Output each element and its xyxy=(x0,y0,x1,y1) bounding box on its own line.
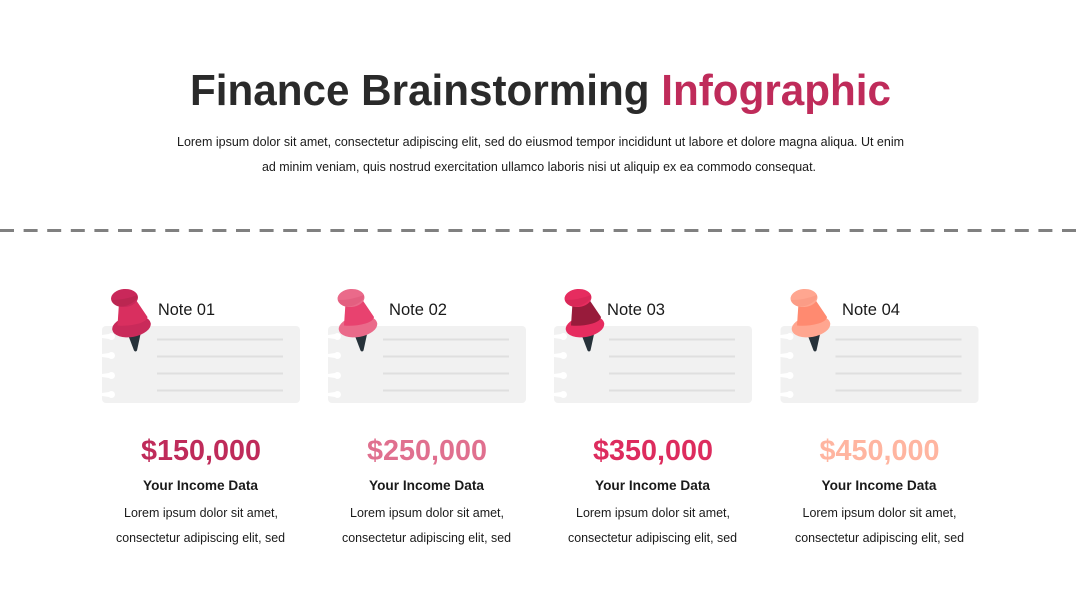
description 02: consectetur adipiscing elit, sed xyxy=(342,531,511,545)
icon: pushpin 01 xyxy=(110,288,153,352)
subheading 02: Your Income Data xyxy=(369,477,484,493)
description 04: Lorem ipsum dolor sit amet, xyxy=(802,506,956,520)
description 01 xyxy=(116,506,285,545)
icon: pushpin 02 xyxy=(337,288,379,352)
description 03: consectetur adipiscing elit, sed xyxy=(568,531,737,545)
label: note 04: Note 04 xyxy=(842,301,900,319)
title: Finance Brainstorming Infographic xyxy=(190,66,891,115)
panel: note 04 xyxy=(780,288,978,545)
intro text xyxy=(177,135,904,174)
description 01: consectetur adipiscing elit, sed xyxy=(116,531,285,545)
panel: note 02 xyxy=(328,288,526,545)
description 03: Lorem ipsum dolor sit amet, xyxy=(576,506,730,520)
note paper 01 xyxy=(102,326,300,403)
amount 01: $150,000 xyxy=(141,435,261,467)
label: note 01: Note 01 xyxy=(158,301,215,319)
intro text: ad minim veniam, quis nostrud exercitation ullamco laboris nisi ut aliquip ex ea commodo consequat. xyxy=(262,160,816,174)
amount 02: $250,000 xyxy=(367,435,487,467)
icon: pushpin 04 xyxy=(790,288,832,352)
amount 03: $350,000 xyxy=(593,435,713,467)
description 02 xyxy=(342,506,511,545)
label: note 03: Note 03 xyxy=(607,301,665,319)
description 01: Lorem ipsum dolor sit amet, xyxy=(124,506,278,520)
note paper 04 xyxy=(780,326,978,403)
subheading 01: Your Income Data xyxy=(143,477,258,493)
label: note 02: Note 02 xyxy=(389,301,447,319)
subheading 03: Your Income Data xyxy=(595,477,710,493)
subheading 04: Your Income Data xyxy=(822,477,937,493)
panel: note 01 xyxy=(102,288,300,545)
description 03 xyxy=(568,506,737,545)
icon: pushpin 03 xyxy=(564,288,606,352)
intro text: Lorem ipsum dolor sit amet, consectetur adipiscing elit, sed do eiusmod tempor incididunt ut labore et dolore magna aliqua. Ut enim xyxy=(177,135,904,149)
panel: note 03 xyxy=(554,288,752,545)
amount 04: $450,000 xyxy=(820,435,940,467)
description 02: Lorem ipsum dolor sit amet, xyxy=(350,506,504,520)
description 04 xyxy=(795,506,964,545)
description 04: consectetur adipiscing elit, sed xyxy=(795,531,964,545)
note paper 03 xyxy=(554,326,752,403)
note paper 02 xyxy=(328,326,526,403)
